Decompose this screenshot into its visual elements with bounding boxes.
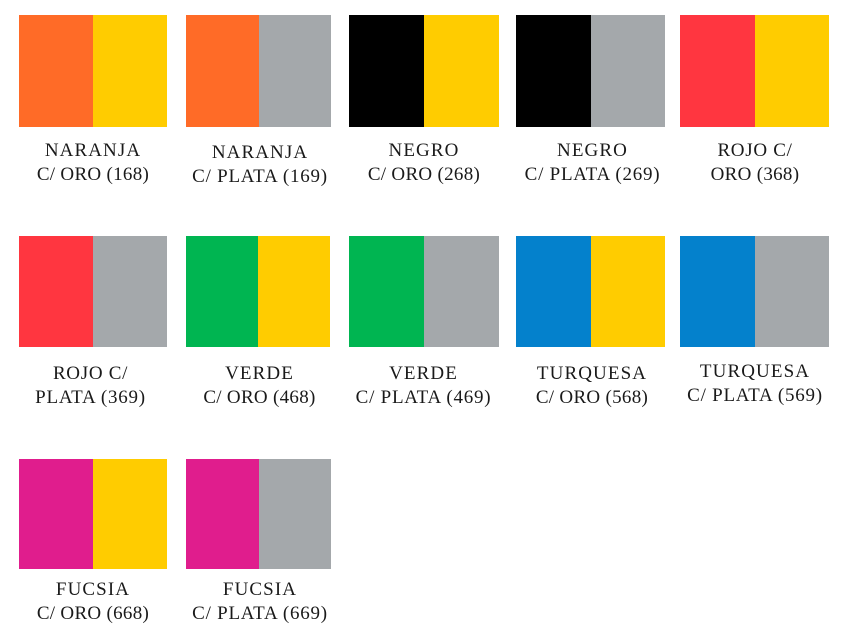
swatch: negro oro (349, 15, 499, 127)
label: turquesa plata (687, 361, 823, 406)
label: naranja oro: C/ ORO (168) (37, 164, 149, 185)
swatch: fucsia plata (186, 459, 331, 569)
label: naranja oro: NARANJA (45, 140, 141, 161)
label: rojo oro: ORO (368) (711, 164, 799, 185)
label: fucsia plata: C/ PLATA (669) (192, 603, 328, 624)
label: verde plata: VERDE (389, 363, 458, 384)
label: verde oro (203, 363, 316, 408)
swatch: naranja oro (19, 15, 167, 127)
label: turquesa oro (536, 363, 648, 408)
label: negro oro (368, 140, 480, 185)
swatch: negro plata (516, 15, 665, 127)
swatch: rojo oro (680, 15, 829, 127)
swatch: turquesa oro (516, 236, 665, 347)
label: fucsia oro (37, 579, 149, 624)
label: negro oro: C/ ORO (268) (368, 164, 480, 185)
label: rojo plata: ROJO C/ (53, 363, 128, 384)
label: naranja plata (192, 142, 328, 187)
label: turquesa plata: TURQUESA (700, 361, 810, 382)
label: fucsia plata: FUCSIA (223, 579, 297, 600)
label: naranja plata: C/ PLATA (169) (192, 166, 328, 187)
label: verde oro: C/ ORO (468) (203, 387, 316, 408)
label: negro plata: NEGRO (557, 140, 628, 161)
label: verde plata (356, 363, 491, 408)
label: turquesa oro: TURQUESA (537, 363, 647, 384)
swatch: naranja plata (186, 15, 331, 127)
label: rojo plata: PLATA (369) (35, 387, 146, 408)
label: fucsia plata (192, 579, 328, 624)
label: rojo oro: ROJO C/ (717, 140, 793, 161)
label: rojo plata (35, 363, 146, 408)
label: fucsia oro: C/ ORO (668) (37, 603, 149, 624)
label: turquesa plata: C/ PLATA (569) (687, 385, 823, 406)
label: naranja plata: NARANJA (212, 142, 308, 163)
swatch: rojo plata (19, 236, 167, 347)
label: negro plata (525, 140, 660, 185)
label: turquesa oro: C/ ORO (568) (536, 387, 648, 408)
label: negro oro: NEGRO (389, 140, 459, 161)
swatch: verde plata (349, 236, 499, 347)
label: negro plata: C/ PLATA (269) (525, 164, 660, 185)
swatch: verde oro (186, 236, 330, 347)
label: fucsia oro: FUCSIA (56, 579, 130, 600)
swatch: turquesa plata (680, 236, 829, 347)
label: rojo oro (711, 140, 799, 185)
label: naranja oro (37, 140, 149, 185)
label: verde oro: VERDE (225, 363, 294, 384)
label: verde plata: C/ PLATA (469) (356, 387, 491, 408)
swatch: fucsia oro (19, 459, 167, 569)
